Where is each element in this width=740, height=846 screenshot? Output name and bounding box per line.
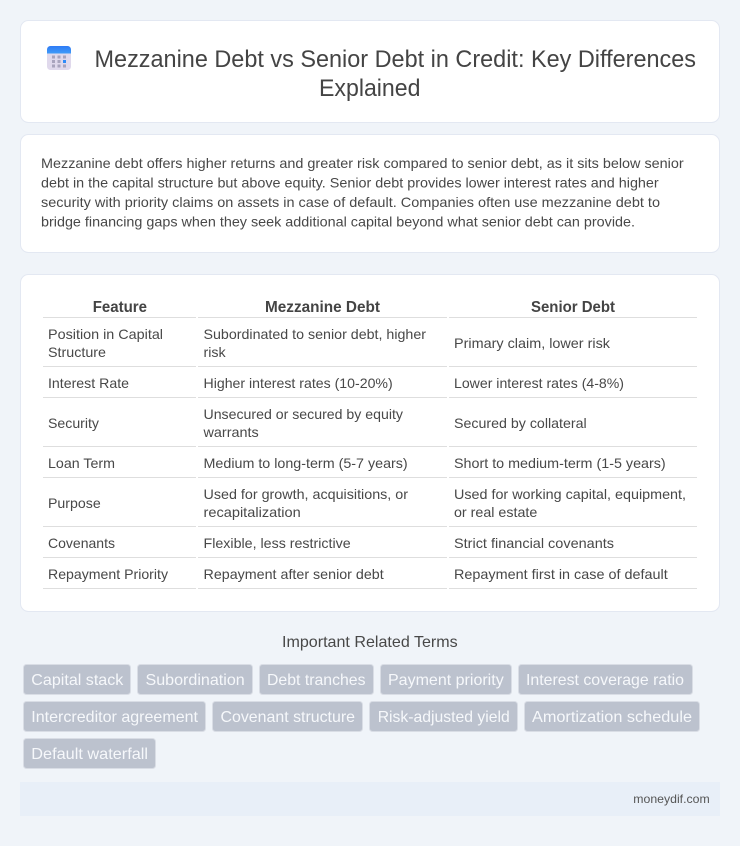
related term tags: Default waterfall [31, 746, 148, 763]
icon: calendar [47, 46, 71, 70]
related term tags: Capital stack [31, 672, 124, 689]
table header row: Feature [93, 299, 147, 316]
text block: introduction: debt in the capital structure but above equity. Senior debt provides lower interest rates and higher [41, 174, 659, 190]
row: security [48, 406, 587, 440]
row: security: Unsecured or secured by equity [204, 406, 403, 422]
row: purpose: Used for working capital, equipment, [454, 486, 686, 502]
related term tags: Amortization schedule [532, 709, 692, 726]
panel: comparison table [20, 274, 720, 612]
row: purpose: or real estate [454, 504, 538, 520]
row: loan term: Short to medium-term (1-5 years) [454, 455, 666, 471]
title: Mezzanine Debt vs Senior Debt in Credit: Key Differences [94, 46, 696, 73]
table header row: Mezzanine Debt [265, 299, 381, 316]
row: purpose: recapitalization [204, 504, 301, 520]
row: position in capital structure: risk [204, 344, 227, 360]
row: repayment priority: Repayment first in case of default [454, 566, 668, 582]
heading: important related terms: Important Related Terms [282, 634, 458, 651]
related term tags [24, 664, 700, 768]
related term tags: Covenant structure [220, 709, 355, 726]
table header row [93, 299, 616, 316]
title [94, 46, 696, 102]
text block: introduction [41, 155, 684, 230]
row: covenants: Covenants [48, 535, 115, 551]
row: interest rate [48, 375, 624, 391]
row: covenants [48, 535, 614, 551]
table header row: Senior Debt [531, 299, 616, 316]
row: interest rate: Higher interest rates (10-20%) [204, 375, 393, 391]
row: covenants: Strict financial covenants [454, 535, 614, 551]
row: interest rate: Lower interest rates (4-8%) [454, 375, 624, 391]
related term tags: Payment priority [388, 672, 504, 689]
row: loan term [48, 455, 666, 471]
title: Explained [319, 75, 420, 102]
row: security: warrants [202, 424, 259, 440]
row: interest rate: Interest Rate [48, 375, 129, 391]
panel: header [20, 20, 720, 122]
row: security: Security [48, 415, 99, 431]
text block: introduction: bridge financing gaps when they seek additional capital beyond what senior debt can provide. [41, 214, 635, 230]
row: position in capital structure: Primary claim, lower risk [454, 335, 611, 351]
row: security: Secured by collateral [454, 415, 587, 431]
row: purpose: Used for growth, acquisitions, or [204, 486, 408, 502]
panel: introduction [20, 134, 720, 252]
row: repayment priority: Repayment after senior debt [204, 566, 384, 582]
text block: introduction: Mezzanine debt offers higher returns and greater risk compared to senior debt, as it sits below senior [41, 155, 684, 171]
footer: moneydif.com [633, 792, 710, 806]
row: position in capital structure: Structure [48, 344, 106, 360]
related term tags: Subordination [146, 672, 245, 689]
row: position in capital structure: Position in Capital [48, 326, 163, 342]
row: loan term: Medium to long-term (5-7 years) [204, 455, 408, 471]
related term tags: Risk-adjusted yield [378, 709, 510, 726]
row: repayment priority [48, 566, 668, 582]
related term tags: Interest coverage ratio [526, 672, 684, 689]
row: purpose [48, 486, 686, 520]
related term tags: Debt tranches [267, 672, 366, 689]
row: covenants: Flexible, less restrictive [204, 535, 351, 551]
row: position in capital structure: Subordinated to senior debt, higher [204, 326, 426, 342]
related term tags: Intercreditor agreement [31, 709, 199, 726]
row: repayment priority: Repayment Priority [48, 566, 168, 582]
row: loan term: Loan Term [48, 455, 115, 471]
footer [20, 782, 720, 816]
row: purpose: Purpose [48, 495, 101, 511]
row: position in capital structure [48, 326, 611, 360]
text block: introduction: security with priority claims on assets in case of default. Companies often use mezzanine debt to [41, 194, 660, 210]
